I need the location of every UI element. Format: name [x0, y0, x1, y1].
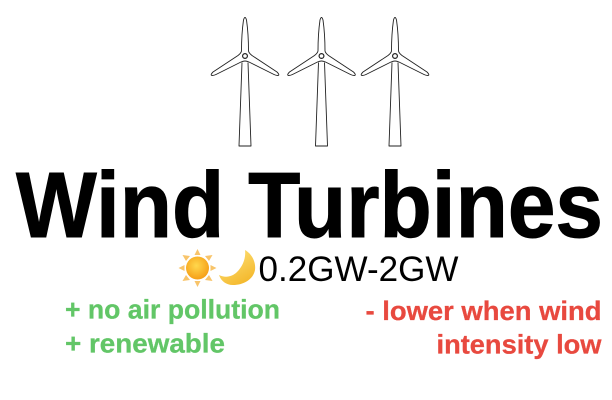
- icon: sun: [178, 249, 216, 287]
- disadvantage line 1: - lower when wind: [366, 296, 602, 326]
- capacity range: 0.2GW-2GW: [258, 250, 458, 289]
- advantage: renewable: + renewable: [65, 328, 225, 358]
- icon: crescent moon: [219, 250, 255, 285]
- disadvantage text: [366, 296, 602, 359]
- icon: wind turbine left: [211, 18, 279, 146]
- advantage: no air pollution: + no air pollution: [65, 294, 280, 324]
- disadvantage line 2: intensity low: [436, 329, 602, 359]
- advantages list: [65, 294, 280, 358]
- icon: wind turbine middle: [288, 18, 355, 146]
- icon: wind turbine right: [361, 18, 429, 146]
